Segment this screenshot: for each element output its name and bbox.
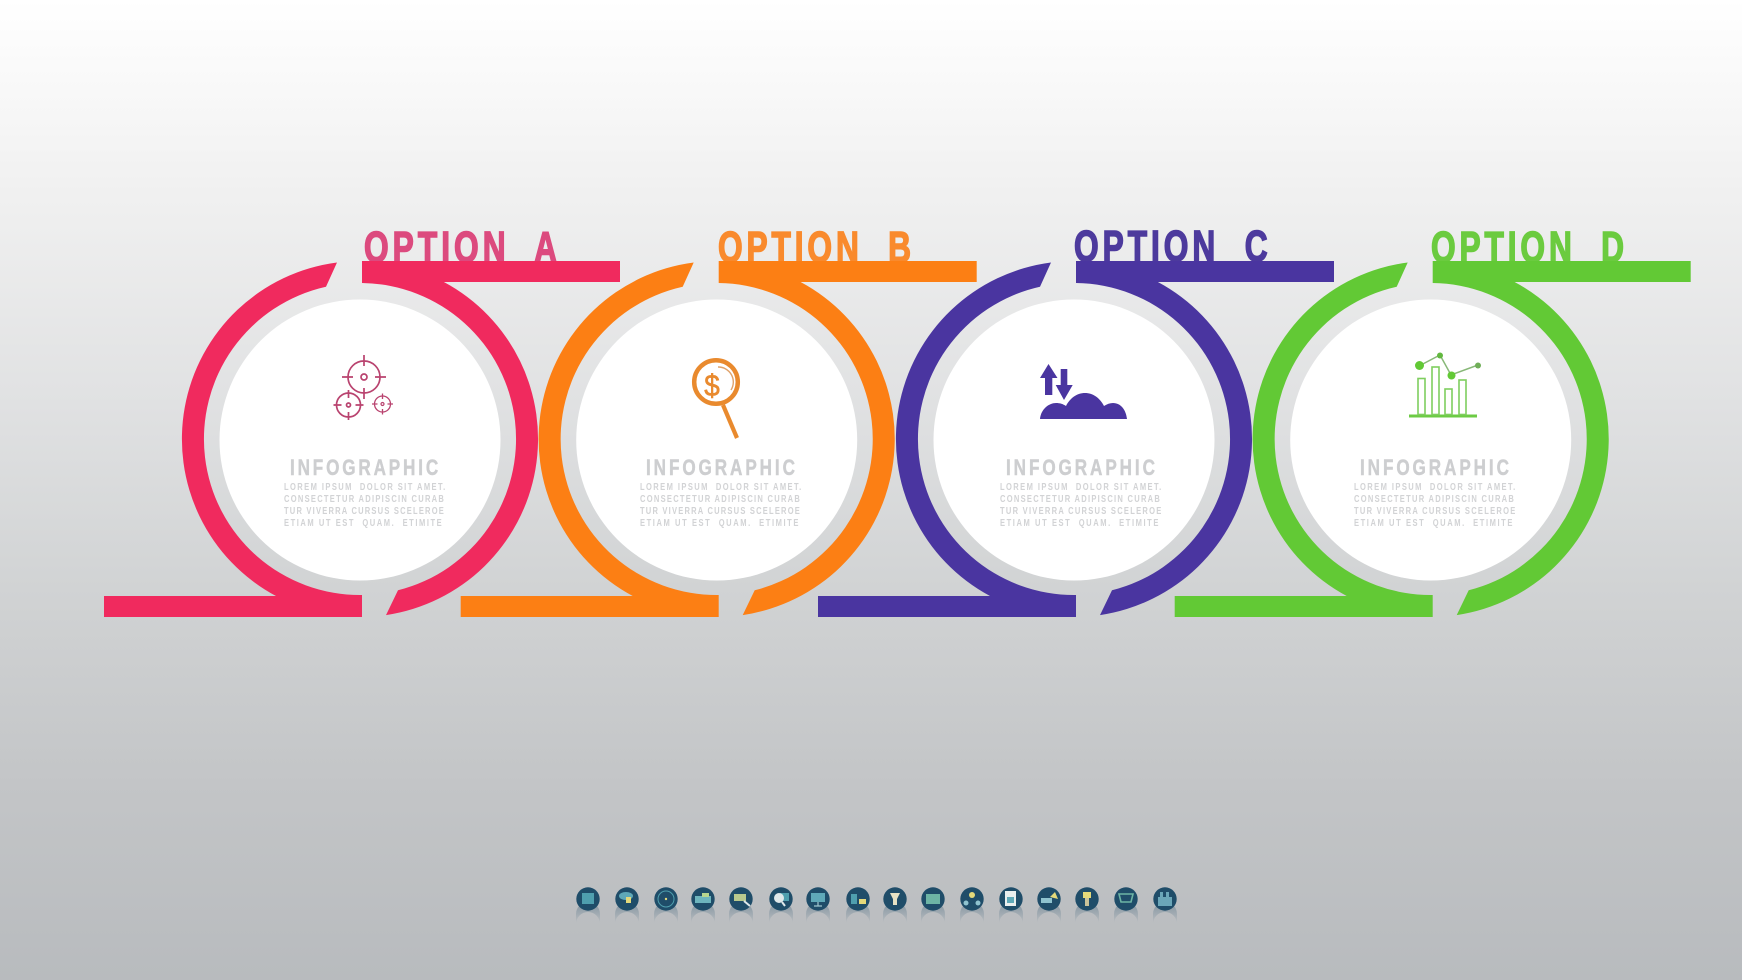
- ring left arc with bottom bar: option B: [461, 262, 719, 617]
- text block: option B: [640, 456, 801, 528]
- text block: option C: TUR VIVERRA CURSUS SCELEROE: [1000, 505, 1161, 516]
- icon 12: [999, 887, 1023, 911]
- ring right arc with top bar: option C: [1076, 261, 1334, 615]
- text block: option B: TUR VIVERRA CURSUS SCELEROE: [640, 505, 800, 516]
- ring right arc with top bar: option D: [1433, 261, 1691, 615]
- ring left arc with bottom bar: option A: [104, 262, 362, 617]
- text block: option D: LOREM IPSUM DOLOR SIT AMET.: [1354, 481, 1515, 492]
- icon 15: [1114, 887, 1138, 911]
- heading: option A: OPTION A: [364, 223, 557, 272]
- text block: option D: ETIAM UT EST QUAM. ETIMITE: [1354, 517, 1512, 528]
- icon: magnifier with dollar: $: [704, 369, 720, 403]
- icon 7: [806, 887, 830, 911]
- text block: option C: ETIAM UT EST QUAM. ETIMITE: [1000, 517, 1158, 528]
- text block: option A: LOREM IPSUM DOLOR SIT AMET.: [284, 481, 445, 492]
- icon 5: [729, 887, 753, 911]
- text block: option B: ETIAM UT EST QUAM. ETIMITE: [640, 517, 798, 528]
- icon 1: [576, 887, 600, 911]
- ring right arc with top bar: option B: [719, 261, 977, 615]
- text block: option B: CONSECTETUR ADIPISCIN CURAB: [640, 493, 800, 504]
- ring right arc with top bar: option A: [362, 261, 620, 615]
- ring left arc with bottom bar: option C: [818, 262, 1076, 617]
- icon 10: [921, 887, 945, 911]
- icon 4: [691, 887, 715, 911]
- icon 8: [846, 887, 870, 911]
- icon 13: [1037, 887, 1061, 911]
- text block: option A: TUR VIVERRA CURSUS SCELEROE: [284, 505, 444, 516]
- text block: option D: TUR VIVERRA CURSUS SCELEROE: [1354, 505, 1515, 516]
- icon: arrows and cloud: [1040, 364, 1127, 419]
- circle backing: option B: [576, 300, 857, 580]
- text block: option A: [284, 456, 445, 528]
- text block: option A: INFOGRAPHIC: [290, 456, 438, 481]
- heading: option C: OPTION C: [1074, 222, 1268, 271]
- heading: option B: OPTION B: [718, 223, 911, 272]
- reflections: [576, 902, 1177, 924]
- panel: option B: [461, 223, 977, 617]
- circle backing: option D: [1290, 300, 1571, 580]
- text block: option D: [1354, 456, 1515, 528]
- text block: option D: CONSECTETUR ADIPISCIN CURAB: [1354, 493, 1514, 504]
- icon 3: [654, 887, 678, 911]
- icon 9: [883, 887, 907, 911]
- text block: option B: INFOGRAPHIC: [646, 456, 795, 481]
- icon row: small round icons with reflections: [576, 887, 1177, 924]
- icon 6: [769, 887, 793, 911]
- text block: option D: INFOGRAPHIC: [1360, 456, 1509, 481]
- panel: option C: [818, 222, 1334, 617]
- text block: option A: CONSECTETUR ADIPISCIN CURAB: [284, 493, 444, 504]
- text block: option C: CONSECTETUR ADIPISCIN CURAB: [1000, 493, 1160, 504]
- icon 14: [1075, 887, 1099, 911]
- icon: bar chart with line: [1409, 352, 1481, 416]
- icon 2: [615, 887, 639, 911]
- circle backing: option A: [220, 300, 500, 580]
- text block: option A: ETIAM UT EST QUAM. ETIMITE: [284, 517, 442, 528]
- ring left arc with bottom bar: option D: [1175, 262, 1433, 617]
- text block: option B: LOREM IPSUM DOLOR SIT AMET.: [640, 481, 801, 492]
- text block: option C: INFOGRAPHIC: [1006, 456, 1155, 481]
- text block: option C: LOREM IPSUM DOLOR SIT AMET.: [1000, 481, 1161, 492]
- icon: targets: [334, 355, 393, 420]
- heading: option D: OPTION D: [1431, 223, 1624, 272]
- icon 11: [960, 887, 984, 911]
- icon 16: [1153, 887, 1177, 911]
- text block: option C: [1000, 456, 1161, 528]
- circle backing: option C: [934, 300, 1214, 580]
- panel: option A: [104, 223, 620, 617]
- panel: option D: [1175, 223, 1691, 617]
- icon: magnifier with dollar: [694, 360, 738, 438]
